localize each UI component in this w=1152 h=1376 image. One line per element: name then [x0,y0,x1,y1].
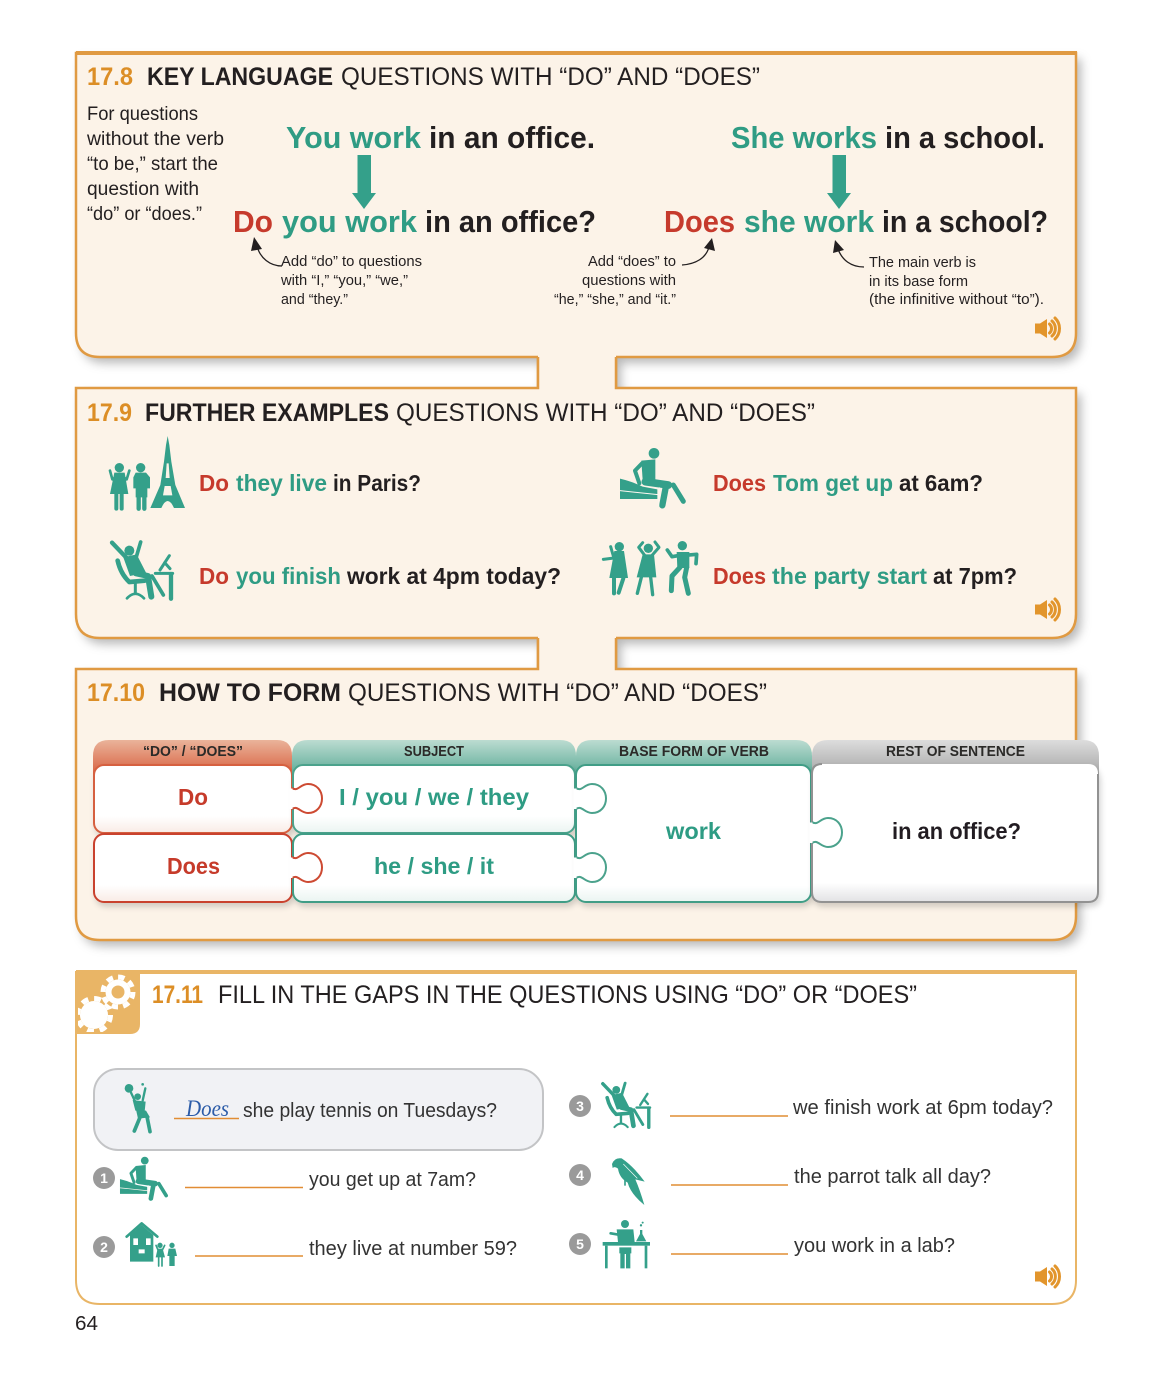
cell: I you we they [293,765,575,833]
page number: 64 [75,1313,98,1335]
example: she works statement [731,120,1045,155]
cell: do: Do [178,784,208,810]
example: does the party start: Does [713,563,766,589]
example: do you work question: in an office? [425,204,596,239]
question 3: 3 [576,1098,584,1114]
heading: 17.9: QUESTIONS WITH “DO” AND “DOES” [396,399,815,427]
heading: 17.8: QUESTIONS WITH “DO” AND “DOES” [341,63,760,91]
column: do / does [93,740,292,902]
sentence: she play tennis on Tuesdays? [243,1100,497,1122]
question 1 [93,1157,476,1199]
question 5 [569,1220,955,1268]
example: do you finish work: work at 4pm today? [346,563,561,589]
example: do you work question: you work [282,204,418,239]
annotation: main verb: (the infinitive without “to”). [869,292,1044,308]
question 3 [569,1083,1053,1127]
heading: 17.10 [87,679,767,707]
heading: 17.11: FILL IN THE GAPS IN THE QUESTIONS USING “DO” OR “DOES” [218,981,917,1009]
puzzle knobs: do and does [290,784,322,882]
column: subject [290,740,576,902]
annotation: add does: “he,” “she,” and “it.” [554,292,676,308]
cell: does [94,834,292,902]
question 1: 1 [100,1170,108,1186]
annotation: add does [554,254,676,308]
icon: person stretching at desk [112,542,173,599]
example: do they live in Paris: Do [199,470,229,496]
example: does she work question: she work [744,204,875,239]
annotation: add do [280,254,422,308]
example: does Tom get up at 6am [713,470,983,496]
question 2: 2 [100,1239,108,1255]
example: does Tom get up at 6am: Tom get up [773,470,893,496]
panel: 17.8 key language [76,51,1077,392]
annotation: add does: questions with [582,273,676,289]
column: rest of sentence: REST OF SENTENCE [886,744,1025,760]
question 4: 4 [576,1167,584,1183]
cell: in an office: in an office? [892,818,1021,844]
question 2: they live at number 59? [309,1238,517,1260]
puzzle knobs: subject [574,784,606,882]
question 3: we finish work at 6pm today? [792,1097,1053,1119]
arrow: annotation to does [682,238,715,265]
icon: gears tab [76,971,140,1034]
example: do you finish work: Do [199,563,229,589]
icon: man getting out of bed [620,448,683,506]
heading: 17.9: FURTHER EXAMPLES [145,399,389,427]
example: do they live in Paris [199,470,421,496]
text block: intro: without the verb [86,128,224,150]
cell: does: Does [167,853,220,879]
example: she works statement: in a school. [885,120,1045,155]
example: does Tom get up at 6am: at 6am? [899,470,983,496]
cell: he she it: he / she / it [374,853,494,879]
question 1: you get up at 7am? [309,1169,476,1191]
heading: 17.9: 17.9 [87,399,132,427]
puzzle knob: work [810,818,842,847]
icon: dancing people [603,541,697,595]
cell: I you we they: I / you / we / they [339,784,529,810]
example: do you work question: Do [233,204,273,239]
annotation: main verb: The main verb is [869,255,976,271]
example: you work statement: You work [286,120,422,155]
column: rest of sentence [810,740,1099,902]
text block: intro: question with [87,178,199,200]
example: does the party start: the party start [772,563,927,589]
example box [94,1069,543,1150]
annotation: add do: and “they.” [281,292,348,308]
column: do / does: “DO” / “DOES” [143,744,243,760]
question 4 [569,1158,991,1205]
arrow: you work to question [352,155,376,209]
panel: 17.10 how to form [76,633,1099,940]
example: does Tom get up at 6am: Does [713,470,766,496]
column: subject: SUBJECT [404,744,464,760]
arrow: she works to question [827,155,851,209]
annotation: add do: Add “do” to questions [281,254,422,270]
example: does the party start: at 7pm? [933,563,1017,589]
question 2 [93,1223,517,1266]
text block: intro [86,103,224,225]
annotation: main verb: in its base form [869,274,968,290]
example: does she work question: in a school? [882,204,1048,239]
column: base form of verb: BASE FORM OF VERB [619,744,769,760]
example: do you finish work [199,563,561,589]
heading: 17.8 [87,63,760,91]
text block: intro: “do” or “does.” [87,203,202,225]
cell: he she it [293,834,575,902]
heading: 17.10: 17.10 [87,679,145,707]
example: she works statement: She works [731,120,877,155]
icon: tennis player [125,1083,150,1132]
example: you work statement: in an office. [429,120,595,155]
cell: work: work [665,818,721,844]
example: do you work question [233,204,596,239]
example: does the party start [713,563,1017,589]
heading: 17.10: QUESTIONS WITH “DO” AND “DOES” [348,679,767,707]
panel: 17.11 fill in the gaps [76,970,1077,1304]
icon: audio [1035,1266,1060,1287]
icon: audio [1035,599,1060,620]
icon: couple and Eiffel Tower [110,436,185,509]
heading: 17.11: 17.11 [152,981,203,1009]
icon: audio [1035,318,1060,339]
cell: work [576,765,811,902]
arrow: annotation to do [251,237,282,266]
example: do they live in Paris: in Paris? [333,470,421,496]
column: base form of verb [574,740,812,902]
example: do they live in Paris: they live [236,470,327,496]
text block: intro: “to be,” start the [87,153,218,175]
annotation: add does: Add “does” to [588,254,676,270]
example: do you finish work: you finish [236,563,341,589]
question 5: 5 [576,1236,584,1252]
example: you work statement [286,120,595,155]
annotation: add do: with “I,” “you,” “we,” [280,273,408,289]
question 4: the parrot talk all day? [794,1166,991,1188]
heading: 17.9 [87,399,815,427]
heading: 17.8: KEY LANGUAGE [147,63,333,91]
cell: in an office [812,764,1098,902]
annotation: main verb [869,255,1044,308]
question 5: you work in a lab? [794,1235,955,1257]
answer: Does: Does [185,1096,229,1121]
cell: do [94,765,292,833]
example: does she work question [664,204,1048,239]
example: does she work question: Does [664,204,735,239]
panel: 17.9 further examples [76,352,1076,673]
heading: 17.10: HOW TO FORM [159,679,341,707]
heading: 17.8: 17.8 [87,63,133,91]
text block: intro: For questions [87,103,198,125]
arrow: annotation to main verb [833,240,864,267]
